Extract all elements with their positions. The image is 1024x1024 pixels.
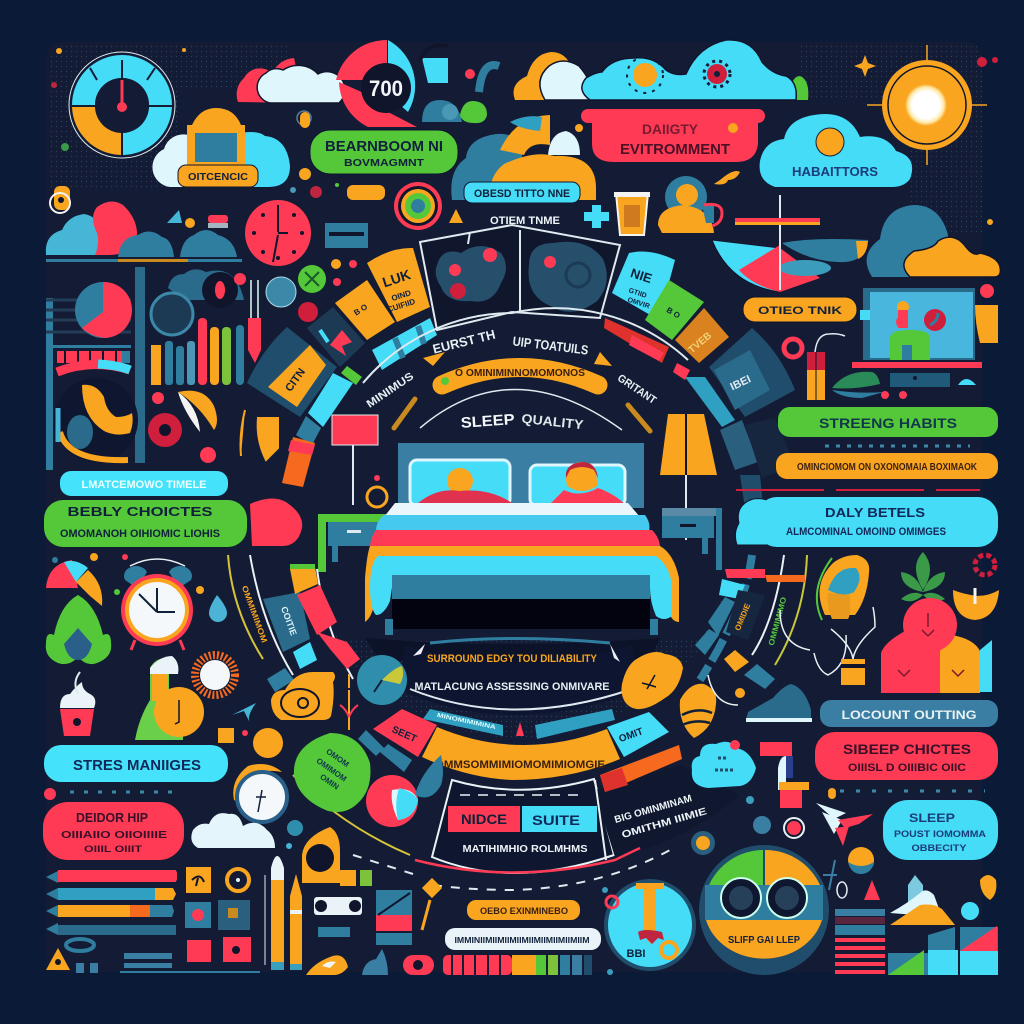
green tree: [46, 595, 111, 664]
orange pill: OMINCIOMOM ON OXONOMAIA BOXIMAOK: [797, 462, 978, 473]
lower left ring segments: OMMIMIMOM: [240, 584, 269, 644]
cloud group centre top: [451, 115, 596, 203]
cyan pill list title: [60, 471, 228, 496]
tabs upper right: NIE: [629, 265, 654, 286]
rocket: [816, 791, 873, 846]
lower right ring segments: [695, 569, 805, 689]
teal text strip left: [423, 709, 503, 736]
spiky sun: [195, 655, 235, 695]
orange half circle: [953, 588, 999, 620]
ring inner upper text: [365, 327, 658, 411]
person left: [418, 468, 512, 503]
red banner daily environment: [581, 109, 765, 162]
pie small: [46, 560, 102, 606]
lower dark band: [400, 645, 640, 715]
nightstand left: [318, 514, 390, 572]
red pill stress detail: OIIIAIIO OIIOIIIIE: [61, 830, 167, 841]
pie chart: [75, 282, 132, 338]
cylinder below bowl: [831, 607, 875, 685]
white pill: IMMINIIMIIMIIMIIMIIMIIMIIMIIMIIM: [454, 936, 590, 945]
sun top right: [854, 45, 987, 165]
teal pill locount: [820, 700, 998, 727]
cyan pill daily bedtime: DALY BETELS: [825, 505, 925, 520]
red pill sleep choices: OIIISL D OIIIBIC OIIC: [848, 762, 966, 774]
orange blob right: [621, 652, 683, 709]
sleep quality title: QUALITY: [521, 411, 584, 432]
teal ball small: [286, 820, 303, 849]
blue clock: [233, 764, 287, 822]
teal ball: [357, 655, 407, 705]
cyan pill sleep: POUST IOMOMMA: [894, 829, 987, 839]
cyan pill daily bedtime: ALMCOMINAL OMOIND OMIMGES: [786, 526, 946, 538]
small plant: [340, 674, 358, 730]
teal icons: [422, 100, 487, 123]
teal panel icon: [325, 223, 368, 248]
bar chart: [151, 318, 244, 385]
orange shield: [680, 684, 716, 738]
fish circle: [54, 378, 138, 462]
cyan pill label: [464, 182, 580, 203]
ring inner upper text: UIP TOATUILS: [512, 333, 589, 358]
segmented bar: [443, 955, 592, 975]
sleep quality title: [460, 411, 584, 432]
lower arc text: SURROUND EDGY TOU DILIABILITY: [427, 653, 598, 665]
ring inner upper text: EURST TH: [431, 327, 497, 357]
red tab: [373, 709, 437, 757]
green pill bedtime choices: [44, 498, 302, 547]
orange badge and ring: [218, 728, 283, 758]
device icon: [420, 45, 499, 92]
bottom left minor icons: [46, 939, 260, 973]
lock icon: [50, 186, 70, 213]
bottom centre pills: [467, 900, 580, 920]
coloured bottom arc: [415, 848, 640, 872]
map panels top: [420, 225, 620, 330]
gear in cloud: [704, 61, 730, 87]
tabs upper right: B O: [665, 305, 682, 320]
red banner daily environment: DAIIGTY: [642, 121, 699, 137]
cloud group centre top: OBESD TITTO NNE: [474, 188, 570, 200]
teal text strip left: MINOMIMIMINA: [436, 713, 497, 731]
gauge top left: [69, 52, 175, 158]
panel nice/suite: [432, 779, 614, 873]
cyan pill daily bedtime: [735, 497, 998, 547]
red marker: [516, 722, 524, 736]
orange camera: [271, 672, 335, 720]
boat chart: [712, 195, 868, 292]
mug with plate icons: [314, 880, 440, 945]
tabs upper right: TVEB: [687, 330, 714, 356]
orange tabs upper left: CUIFIID: [386, 297, 417, 314]
orange tabs upper left: B O: [352, 302, 369, 317]
leaf plant: [901, 552, 945, 601]
clouds red and white: [237, 58, 345, 103]
misc ring icons lower right: [691, 816, 880, 900]
left stripe column: [46, 267, 145, 470]
bed: [365, 443, 679, 635]
cloud row left: [46, 201, 242, 262]
lower ring line: [410, 689, 632, 710]
cloud with orange monitor: [152, 108, 290, 187]
red pill sleep choices: SIBEEP CHICTES: [843, 741, 971, 757]
pillows: [410, 460, 625, 506]
cyan pill sleep: SLEEP: [909, 811, 955, 825]
donut gauge 700: [336, 40, 417, 127]
orange frame shape: [302, 827, 372, 886]
sneaker: [746, 684, 812, 722]
rainbow spiral: [394, 182, 442, 230]
dotted texture: [50, 42, 982, 738]
red dot: [44, 788, 56, 800]
drop icon: [209, 595, 227, 622]
headboard: [398, 443, 644, 508]
lower left ring segments: COITIE: [279, 605, 299, 637]
bedroom label green pill: BOVMAGMNT: [344, 158, 424, 169]
lamp left: [332, 415, 387, 507]
green speech bubble: [294, 733, 370, 812]
cyan pill list title: LMATCEMOWO TIMELE: [82, 479, 206, 491]
cylinder and cable: [784, 334, 907, 400]
panel nice/suite: NIDCE: [461, 811, 507, 827]
small red line: [736, 489, 980, 491]
horizontal pens: [46, 870, 177, 935]
flask and clock: [135, 656, 204, 740]
swoosh: [714, 171, 740, 184]
nightstand right: [662, 508, 722, 570]
floor band: [365, 638, 660, 664]
bedroom label green pill: [310, 130, 458, 174]
sub label white: OTIEM TNME: [490, 215, 560, 227]
lower arc text: MATLACUNG ASSESSING ONMIVARE: [414, 681, 610, 693]
band arc right segments: [604, 318, 795, 515]
cyan pill stress: [44, 745, 228, 782]
green pill sleeping habits: [778, 407, 998, 437]
red tab: SEET: [390, 724, 418, 745]
green pill bedtime choices: OMOMANOH OIHIOMIC LIOHIS: [60, 528, 220, 540]
steaming cup: [60, 672, 95, 736]
orange clouds top centre: [514, 40, 808, 100]
cyan pill stress: STRES MANIIGES: [73, 757, 201, 774]
orange leaf, flower: [148, 391, 278, 463]
tower and mountain: [890, 875, 996, 925]
panel nice/suite: SUITE: [532, 812, 580, 828]
ring inner upper text: GRITANT: [615, 372, 658, 407]
red pill stress detail: OIIIL OIIIT: [84, 844, 143, 854]
circle label: SLIFP GAI LLEP: [728, 935, 800, 946]
plus sign: [584, 205, 609, 228]
red crescent ball: [366, 755, 443, 827]
teal lower-left segments: [358, 730, 412, 772]
red segment row: [57, 351, 130, 372]
cyan pill sleep: OBBECITY: [912, 843, 966, 853]
lower right ring segments: OMIDIE: [733, 602, 752, 632]
orange pill study: OTIEO TNIK: [758, 305, 842, 317]
big circle chart: [699, 845, 829, 975]
panel right text: OMITHM IIIMIE: [620, 806, 709, 841]
teal text strip right: [535, 709, 615, 739]
tabs upper right: OMVIR: [626, 297, 650, 310]
person right: [542, 462, 632, 512]
green and teal circles: [266, 259, 357, 322]
tabs upper right: [612, 252, 729, 363]
inner white arc: [420, 389, 622, 430]
green speech bubble: OMIMOM: [315, 756, 348, 784]
red pipe icon: [760, 742, 809, 808]
red clock: [245, 200, 311, 266]
cyan cloud icon: [692, 742, 756, 788]
cyan circle figure: [604, 879, 696, 971]
red pill stress detail: [43, 802, 184, 860]
big orange ribbon: OMMSOMMIMIOMOMIMIOMGIE: [435, 759, 605, 771]
bedroom label green pill: BEARNBOOM NI: [325, 138, 443, 155]
band arc left segments: CITN: [283, 366, 308, 394]
band arc left segments: [247, 308, 688, 487]
panel nice/suite: MATIHIMHIO ROLMHMS: [462, 844, 588, 855]
panel right text: BIG OMINMINAM: [613, 793, 693, 826]
orange arc ribbon: O OMINIMINNOMOMONOS: [455, 368, 585, 379]
figure value: BBI: [627, 948, 645, 960]
arc and bowl right: [708, 555, 869, 705]
habits label: HABAITTORS: [792, 164, 878, 179]
lower right ring segments: OMMIMIMO: [767, 596, 788, 647]
orange sticks: [394, 399, 650, 431]
teal pill locount: LOCOUNT OUTTING: [842, 708, 976, 722]
square chart blocks: [888, 926, 998, 975]
lower arc text: [413, 644, 620, 693]
gear right: [975, 555, 995, 575]
monitor label: OITCENCIC: [188, 172, 248, 183]
duvet: [384, 503, 640, 517]
green speech bubble: OMIN: [318, 772, 341, 792]
dotted row left: [70, 790, 175, 794]
dotted row: [825, 444, 970, 448]
white cloud lower: [191, 813, 275, 848]
big orange ribbon: [422, 727, 620, 780]
cyan tab: [607, 712, 669, 757]
white pill: [445, 928, 601, 950]
small icon row bottom: [306, 949, 434, 975]
clouds right: [867, 205, 1000, 277]
outer arcs left: [228, 555, 670, 890]
cyan tab: OMIT: [618, 726, 645, 745]
person with mug: [658, 176, 722, 233]
outer arcs right: [700, 555, 807, 680]
teal badge and cloud: [151, 269, 246, 335]
red pill sleep choices: [815, 732, 998, 780]
green pill bedtime choices: BEBLY CHOICTES: [68, 504, 213, 519]
green pill sleeping habits: STREENG HABITS: [819, 415, 957, 431]
red banner daily environment: EVITROMMENT: [620, 141, 730, 158]
sun in cloud: [627, 57, 663, 93]
lamp right: [660, 414, 717, 540]
plane icon: [232, 703, 256, 723]
monitor with person: [852, 284, 998, 387]
vertical pens: [265, 856, 302, 970]
cyan pill sleep: [883, 800, 998, 860]
beer glass: [614, 192, 650, 235]
ring inner upper text: MINIMUS: [365, 370, 416, 411]
art block: [307, 307, 365, 367]
lower left ring segments: [240, 564, 360, 692]
orange tabs upper left: OIND: [390, 288, 412, 303]
tabs upper right: GTIID: [628, 287, 647, 300]
small squares bottom left: [185, 867, 251, 962]
bed frame: [392, 575, 650, 599]
pill text: OEBO EXINMINEBO: [480, 906, 568, 916]
habits cloud: [760, 114, 912, 187]
green speech bubble: OMOM: [324, 747, 351, 769]
red pill stress detail: DEIDOR HIP: [76, 810, 148, 825]
orange pill: [776, 453, 998, 479]
red pen: [248, 280, 261, 363]
dotted row lower right: [840, 790, 985, 792]
orange pill study: [743, 297, 857, 322]
stripes and squares bottom right: [835, 909, 885, 974]
orange tabs upper left: [335, 248, 430, 340]
sleep quality title: SLEEP: [460, 411, 515, 432]
panel right text: [594, 745, 739, 860]
gauge value: 700: [369, 76, 403, 101]
orange arc ribbon: [441, 368, 598, 385]
small dots and pill: [290, 111, 385, 200]
band arc right segments: IBEI: [728, 373, 753, 393]
tab text: LUK: [380, 266, 413, 290]
orange triangle: [449, 209, 463, 223]
red and orange figure: [881, 598, 992, 693]
alarm clock: [121, 559, 193, 650]
